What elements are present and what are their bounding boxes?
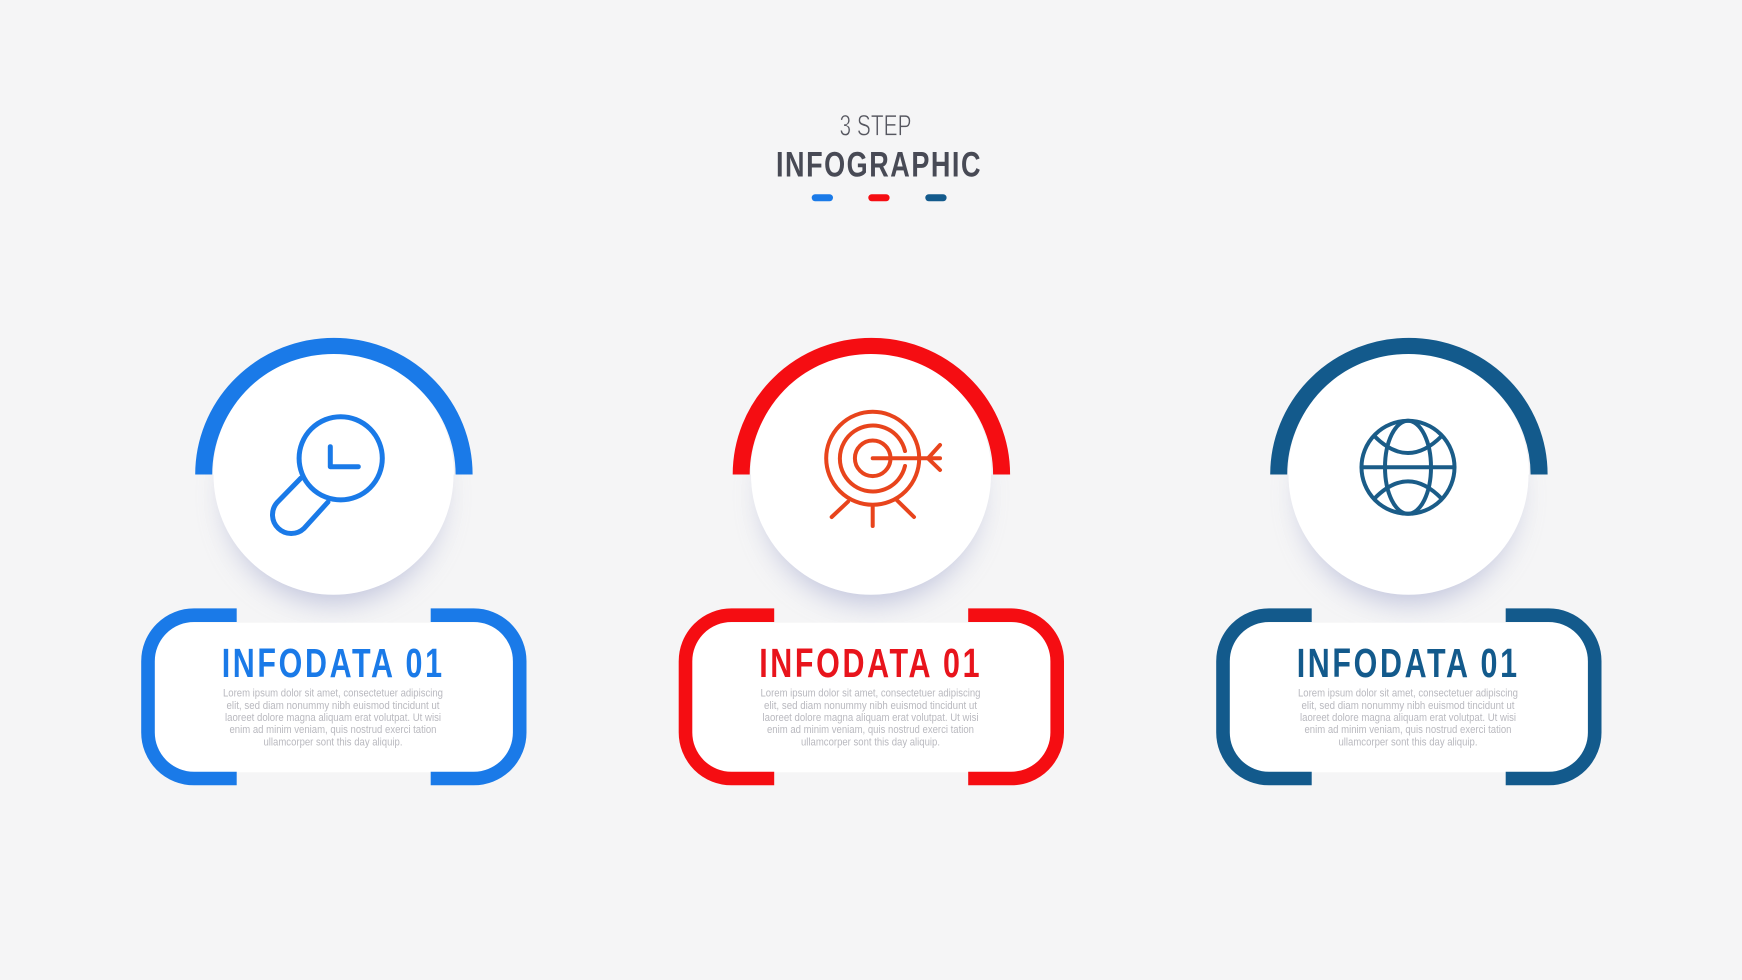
subtitle: 3 STEP: 3 STEP <box>840 110 912 142</box>
heading: INFODATA 01 <box>1297 640 1520 686</box>
top arc <box>204 346 464 474</box>
title block <box>776 110 982 201</box>
icon: magnifier with clock <box>273 417 382 533</box>
body text: Lorem ipsum dolor sit amet, consectetuer adipiscing <box>1298 688 1518 700</box>
title: INFOGRAPHIC: INFOGRAPHIC <box>776 145 982 185</box>
body text: laoreet dolore magna aliquam erat volutpat. Ut wisi <box>225 712 441 724</box>
heading: INFODATA 01 <box>222 640 445 686</box>
text box background <box>1225 623 1592 772</box>
body text: enim ad minim veniam, quis nostrud exerci tation <box>1304 724 1512 736</box>
body text: Lorem ipsum dolor sit amet, consectetuer adipiscing <box>760 688 981 700</box>
left bracket <box>148 615 237 778</box>
right bracket <box>1506 615 1595 778</box>
left bracket <box>686 615 774 778</box>
white circle <box>1288 354 1529 595</box>
top arc <box>741 346 1002 474</box>
circle shadow <box>1302 390 1514 602</box>
colour pills <box>812 194 947 201</box>
heading: INFODATA 01 <box>759 640 982 686</box>
circle shadow <box>228 390 440 602</box>
body text: Lorem ipsum dolor sit amet, consectetuer adipiscing <box>223 688 443 700</box>
white circle <box>750 354 992 595</box>
body text: enim ad minim veniam, quis nostrud exerci tation <box>767 724 974 736</box>
body text: ullamcorper sont this day aliquip. <box>801 736 940 748</box>
text box background <box>688 623 1054 772</box>
body text: ullamcorper sont this day aliquip. <box>264 736 402 748</box>
right bracket <box>968 615 1057 778</box>
circle shadow <box>765 390 977 602</box>
body text: elit, sed diam nonummy nibh euismod tincidunt ut <box>1302 700 1515 712</box>
step 1: blue panel <box>148 346 520 778</box>
icon: globe <box>1362 421 1454 514</box>
white circle <box>213 354 454 595</box>
body text <box>223 688 443 748</box>
left bracket <box>1223 615 1312 778</box>
body text: laoreet dolore magna aliquam erat volutpat. Ut wisi <box>1300 712 1516 724</box>
body text <box>760 688 981 748</box>
top arc <box>1279 346 1539 474</box>
icon: target with arrow <box>826 412 940 526</box>
body text <box>1298 688 1518 748</box>
step 3: dark blue panel <box>1223 346 1595 778</box>
step 2: red panel <box>686 346 1057 778</box>
right bracket <box>431 615 520 778</box>
body text: ullamcorper sont this day aliquip. <box>1338 736 1478 748</box>
body text: elit, sed diam nonummy nibh euismod tincidunt ut <box>226 700 440 712</box>
body text: laoreet dolore magna aliquam erat volutpat. Ut wisi <box>762 712 978 724</box>
text box background <box>150 623 517 772</box>
body text: enim ad minim veniam, quis nostrud exerci tation <box>230 724 437 736</box>
body text: elit, sed diam nonummy nibh euismod tincidunt ut <box>764 700 977 712</box>
